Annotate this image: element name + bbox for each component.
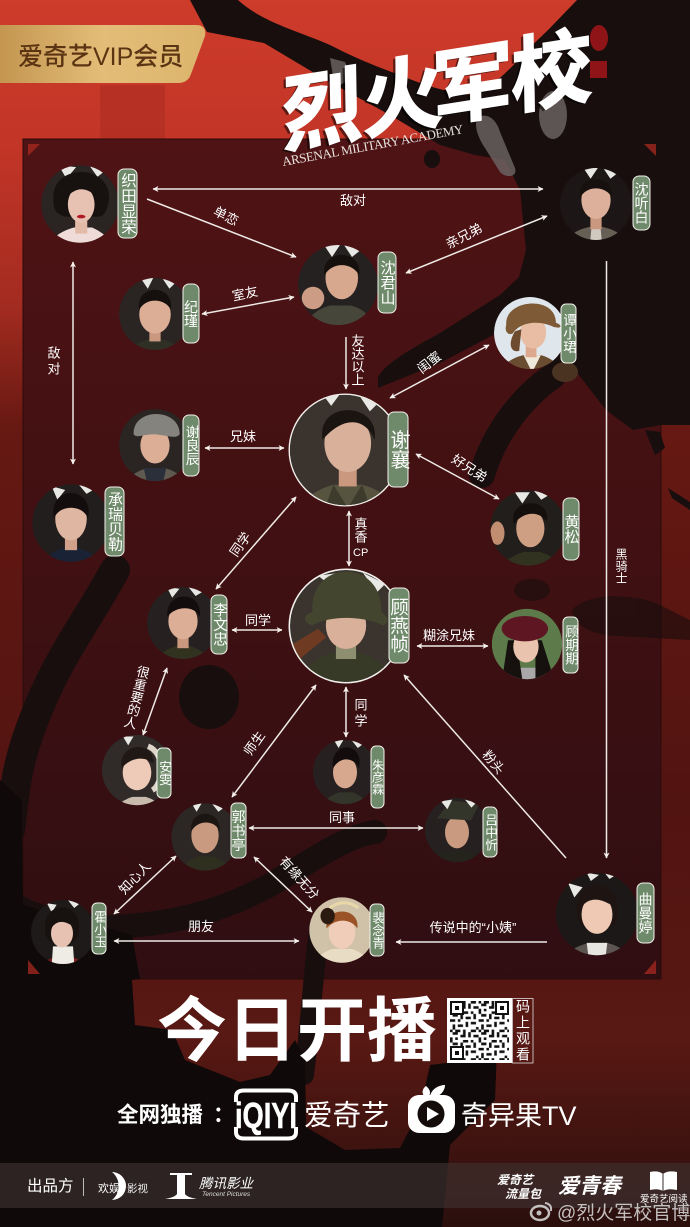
arrow: 有缘无分	[254, 854, 322, 912]
QR code	[447, 998, 512, 1063]
arrow: 单恋	[147, 199, 296, 257]
badge: iQIYI VIP	[0, 25, 205, 83]
arrow: 单恋: 单恋	[211, 203, 241, 229]
character: 沈听白	[560, 168, 650, 240]
logo: 腾讯影业: 腾讯影业	[199, 1176, 254, 1191]
arrow: 传说中的小姨: 传说中的“小姨”	[430, 920, 516, 935]
arrow: 敌对 left: 敌对	[46, 346, 60, 378]
title: 校	[507, 22, 590, 127]
QR caption: 码上观看	[515, 999, 531, 1063]
character: 沈君山	[298, 245, 396, 325]
character: 霍小玉	[31, 900, 106, 964]
character: 裴念青	[309, 897, 384, 963]
footer bar	[0, 1163, 690, 1208]
corner marks	[28, 144, 656, 974]
title: 军	[428, 35, 511, 140]
arrow: 友达以上: 友达以上	[350, 333, 364, 386]
character: 黄松: 黄松	[562, 514, 580, 544]
arrow: 兄妹: 兄妹	[230, 429, 256, 444]
logo: qiyiguo apple	[408, 1085, 455, 1133]
arrow: 同学 diagonal: 同学	[227, 529, 254, 559]
character: 谭小珺: 谭小珺	[561, 313, 577, 354]
character: 朱彦霖	[313, 740, 384, 814]
arrow: 同事: 同事	[329, 810, 355, 825]
arrow: 真香CP	[349, 511, 368, 566]
title	[278, 20, 593, 165]
title: 校	[510, 20, 593, 125]
logo: 欢娱影视: 欢娱	[98, 1181, 120, 1195]
arrow: 闺蜜	[390, 345, 489, 398]
logo: iQIYI: iQIYI	[235, 1095, 297, 1136]
title: 烈	[281, 58, 364, 163]
arrow: 黑骑士: 黑骑士	[614, 548, 628, 584]
logo: 爱奇艺流量包: 流量包	[505, 1187, 542, 1201]
character: 沈听白: 沈听白	[634, 182, 650, 224]
character: 顾期期	[492, 608, 578, 680]
logo: 腾讯影业: Tencent Pictures	[202, 1191, 251, 1198]
arrow: 糊涂兄妹	[417, 628, 488, 646]
arrow: 师生: 师生	[241, 728, 268, 758]
character: 沈君山: 沈君山	[378, 260, 396, 305]
exclusive label: 全网独播	[117, 1103, 203, 1127]
logo: 欢娱影视: 影视	[127, 1182, 148, 1195]
logo: 腾讯影业	[165, 1173, 254, 1199]
arrow: 亲兄弟: 亲兄弟	[443, 220, 485, 252]
arrow: 有缘无分: 有缘无分	[276, 854, 322, 902]
arrow: 真香CP: 真香	[352, 517, 368, 544]
headline: 今日开播: 今日开播	[157, 992, 437, 1070]
logo: 爱奇艺阅读: 爱奇艺阅读	[640, 1193, 688, 1205]
title: 烈	[278, 60, 361, 165]
arrow: 粉头	[404, 675, 566, 858]
character: 黄松	[490, 490, 580, 566]
panel: relationship map backdrop	[23, 139, 661, 979]
character: 顾期期: 顾期期	[563, 625, 579, 667]
weibo watermark: @烈火军校官博	[557, 1202, 690, 1224]
character: 谢襄	[288, 394, 410, 506]
arrow: 同学 horizontal: 同学	[245, 613, 271, 628]
character: 郭书亭: 郭书亭	[230, 809, 246, 852]
arrow: 亲兄弟	[406, 216, 547, 273]
arrow: 朋友: 朋友	[188, 919, 214, 934]
arrow: 同学 horizontal	[232, 613, 282, 630]
arrow: 粉头: 粉头	[479, 747, 508, 777]
arrow: 很重要的人: 很重要的人	[121, 664, 151, 730]
logo: 爱奇艺流量包	[497, 1173, 542, 1201]
character: 谢襄: 谢襄	[387, 429, 410, 470]
arrow: 室友: 室友	[231, 284, 259, 304]
character: 顾燕帧	[289, 570, 410, 696]
arrow: 同学 lower: 同学	[352, 698, 368, 730]
logo: iQIYI	[235, 1090, 297, 1138]
character: 谭小珺	[494, 297, 576, 369]
badge: iQIYI VIP: 爱奇艺VIP会员	[18, 43, 183, 71]
title: 火	[358, 47, 441, 152]
character: 安雯: 安雯	[157, 760, 171, 786]
arrow: 知心人	[114, 856, 176, 914]
title: 火	[361, 45, 444, 150]
logo text: 爱奇艺: 爱奇艺	[304, 1100, 390, 1132]
character: 承瑞贝勒	[32, 484, 124, 562]
subtitle: ARSENAL MILITARY ACADEMY	[281, 121, 465, 169]
character: 曲曼婷	[556, 873, 654, 956]
arrow: 敌对 top: 敌对	[340, 193, 366, 208]
arrow: 糊涂兄妹: 糊涂兄妹	[423, 628, 475, 643]
arrow: 兄妹	[205, 429, 284, 448]
producer label: 出品方	[27, 1177, 74, 1195]
character: 织田显荣	[41, 165, 138, 243]
logo: 欢娱影视	[98, 1172, 148, 1200]
arrow: 很重要的人	[121, 664, 167, 735]
character: 顾燕帧: 顾燕帧	[388, 598, 410, 653]
arrow: 室友	[202, 284, 294, 314]
character: 承瑞贝勒: 承瑞贝勒	[106, 492, 123, 553]
character: 李文忠: 李文忠	[211, 603, 227, 647]
logo: 爱青春: 爱青春	[558, 1175, 624, 1198]
arrow: 闺蜜: 闺蜜	[414, 349, 444, 376]
arrow: 真香CP: CP	[353, 547, 368, 559]
character: 谢良辰	[119, 409, 200, 481]
arrow: 同学 diagonal	[216, 497, 296, 589]
seal stamps	[590, 25, 608, 78]
character: 安雯	[102, 735, 172, 806]
character: 吕中忻	[425, 798, 498, 862]
logo: 爱奇艺阅读	[640, 1171, 688, 1205]
character: 裴念青: 裴念青	[370, 910, 384, 949]
character: 纪瑾: 纪瑾	[183, 300, 199, 328]
arrow: 知心人: 知心人	[116, 859, 154, 897]
title: 军	[431, 33, 514, 138]
character: 朱彦霖: 朱彦霖	[370, 759, 384, 795]
character: 织田显荣: 织田显荣	[119, 172, 137, 235]
arrow: 好兄弟	[416, 451, 499, 499]
character: 郭书亭	[172, 802, 246, 870]
exclusive label: ：	[213, 1103, 235, 1127]
character: 曲曼婷: 曲曼婷	[638, 892, 654, 934]
arrow: 师生	[232, 685, 316, 797]
logo: 爱奇艺流量包: 爱奇艺	[497, 1173, 535, 1187]
character: 纪瑾	[119, 278, 200, 350]
character: 吕中忻: 吕中忻	[483, 813, 497, 851]
character: 霍小玉: 霍小玉	[92, 910, 106, 948]
arrow: 同学 lower	[346, 687, 368, 737]
logo text: 奇异果TV: 奇异果TV	[461, 1101, 577, 1131]
character: 谢良辰: 谢良辰	[184, 425, 199, 466]
character: 李文忠	[147, 587, 228, 659]
arrow: 好兄弟: 好兄弟	[449, 451, 490, 485]
